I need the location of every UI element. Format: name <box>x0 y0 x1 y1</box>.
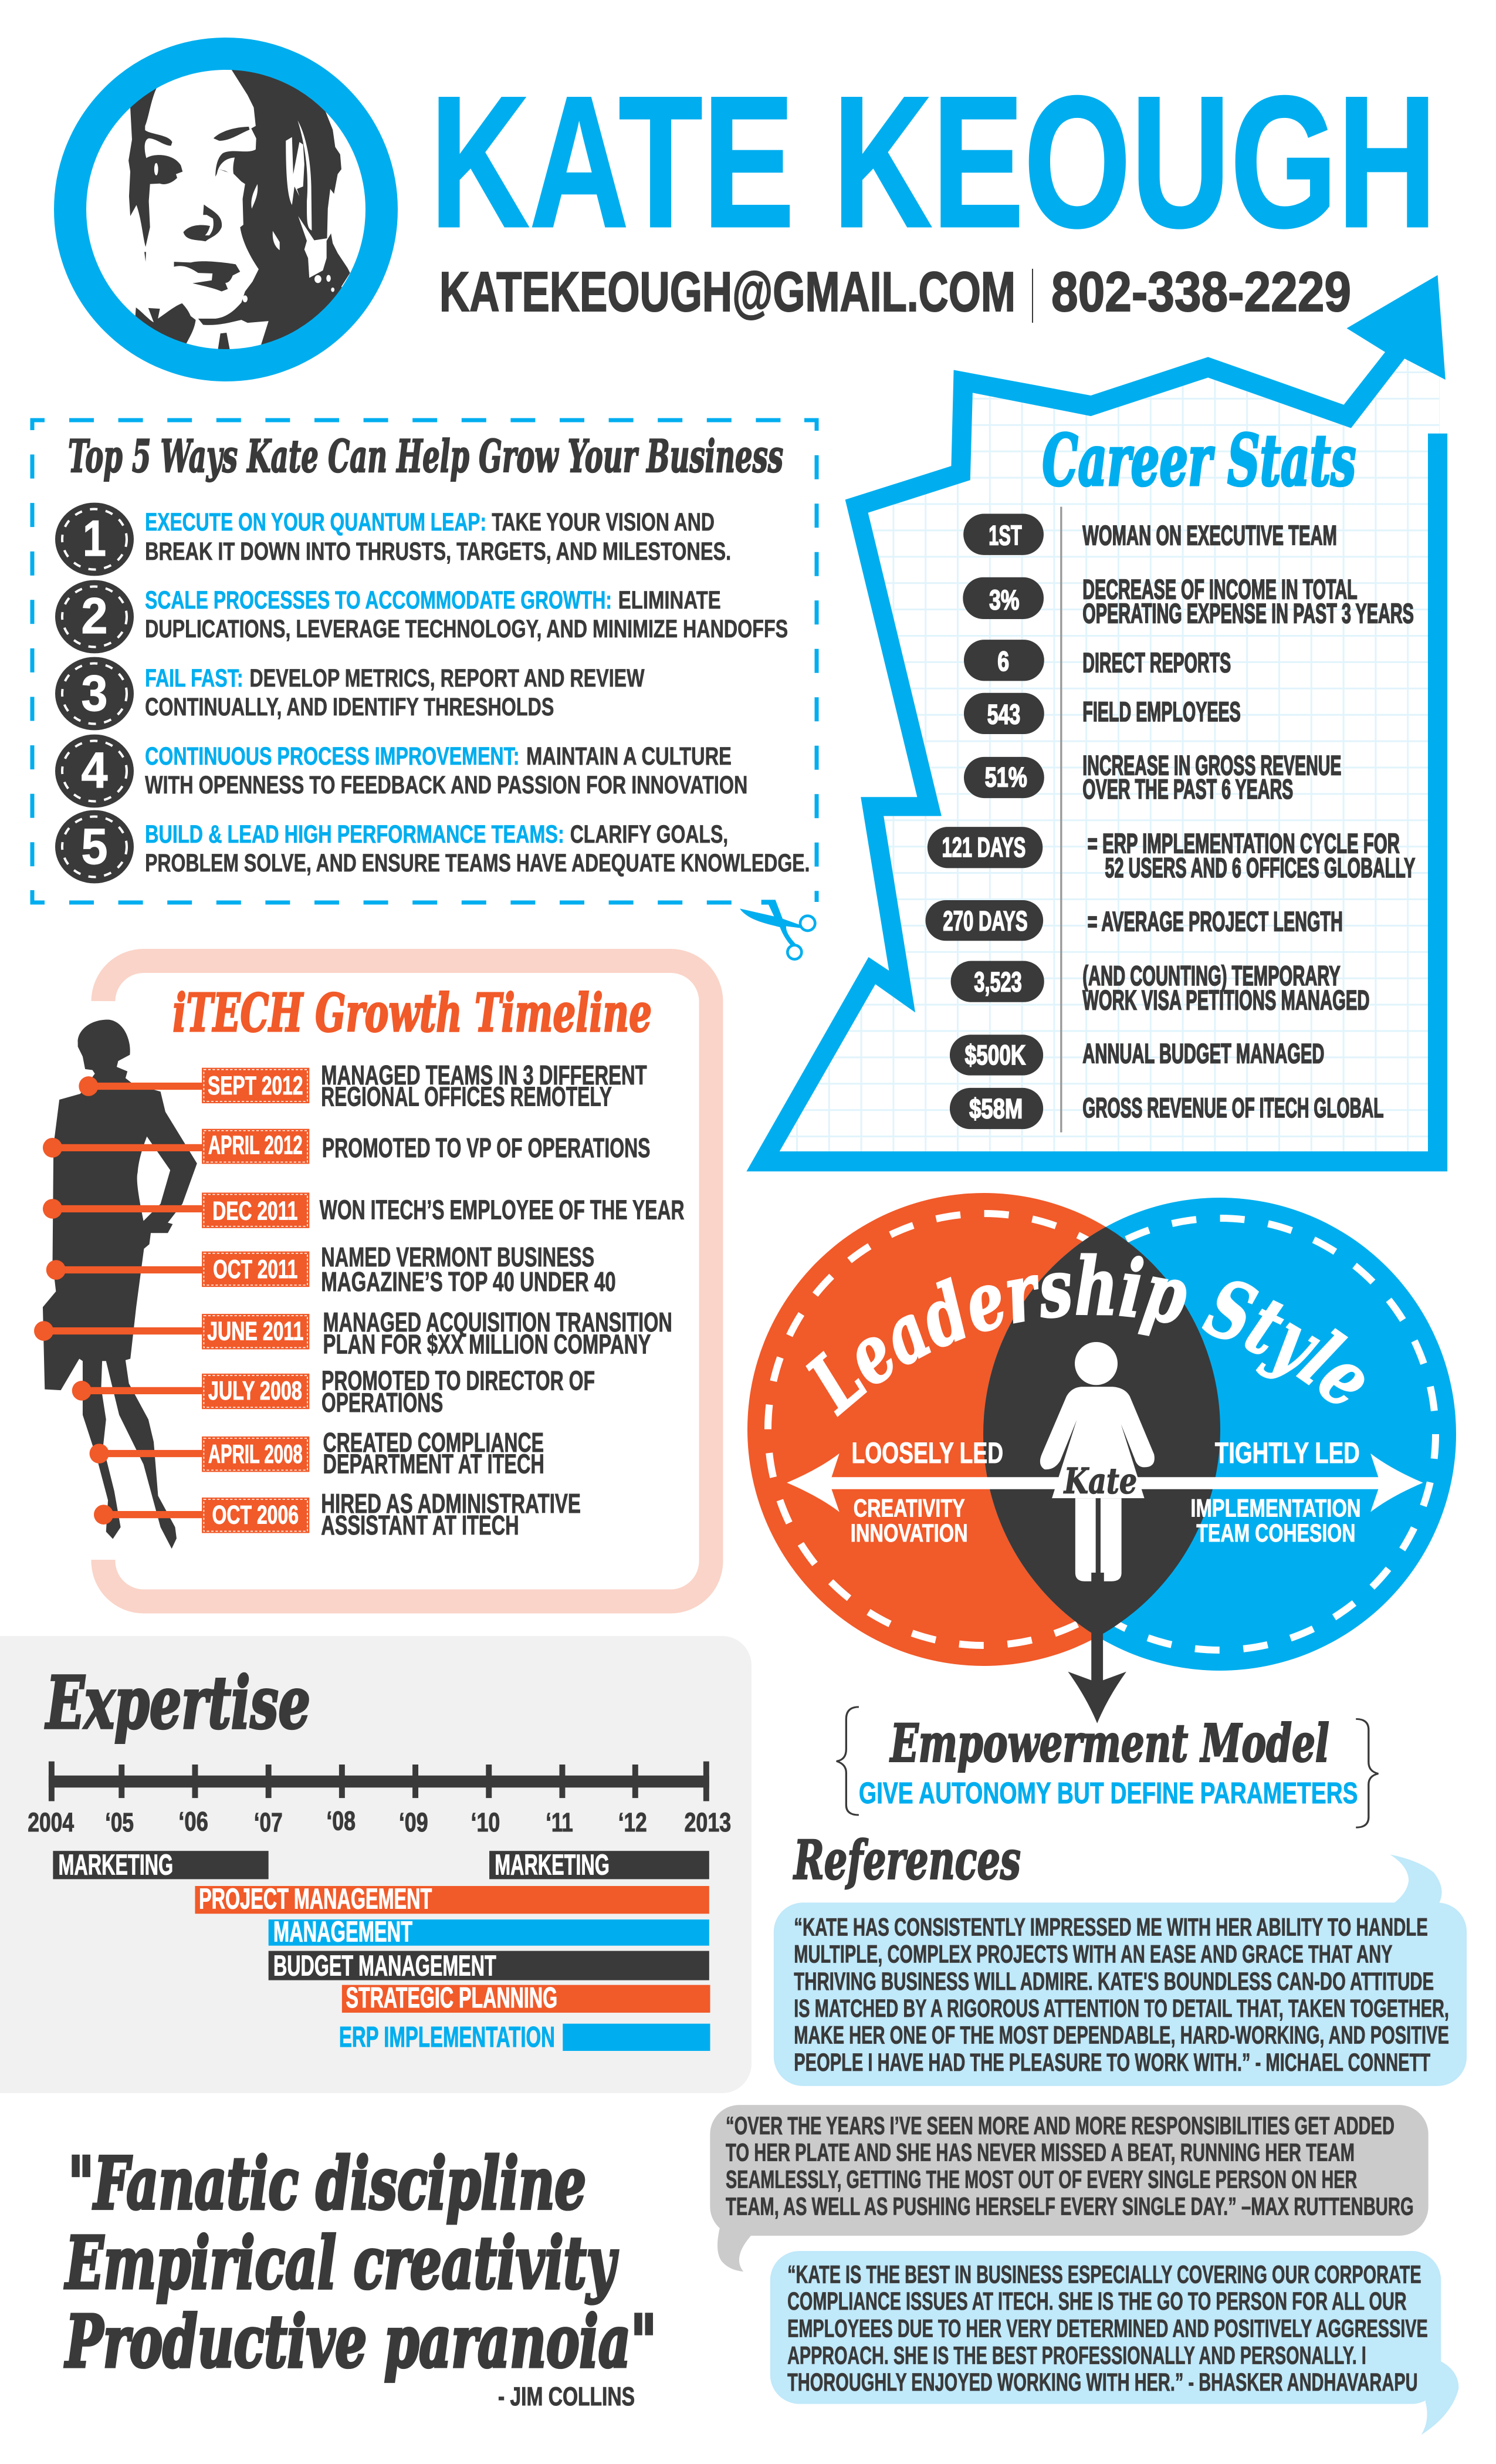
stats table: $58M <box>969 1094 1023 1124</box>
year labels: 2004 <box>28 1808 74 1838</box>
panel: growth timeline: MAGAZINE’S TOP 40 UNDER 40 <box>321 1267 616 1297</box>
portrait ring <box>70 54 381 365</box>
panel: growth timeline: MANAGED ACQUISITION TRANSITION <box>323 1307 672 1337</box>
timeline entries: DEC 2011 <box>212 1196 297 1225</box>
venn labels: IMPLEMENTATION <box>1190 1494 1361 1522</box>
panel: growth timeline: HIRED AS ADMINISTRATIVE <box>321 1489 581 1519</box>
quote <box>65 2141 656 2411</box>
number badge 1 <box>55 503 134 576</box>
heading: References <box>793 1829 1021 1892</box>
stats table <box>925 419 1415 1133</box>
down arrow <box>1068 1631 1126 1723</box>
list text: SCALE PROCESSES TO ACCOMMODATE GROWTH: <box>145 586 612 614</box>
speech bubble 1 <box>774 1854 1467 2086</box>
year labels: ‘12 <box>618 1808 647 1838</box>
number badge 2 <box>55 580 134 653</box>
stats table: 121 DAYS <box>942 832 1025 863</box>
year labels: ‘09 <box>399 1808 428 1838</box>
list text: CONTINUALLY, AND IDENTIFY THRESHOLDS <box>145 692 554 721</box>
expertise bars: MARKETING <box>58 1849 173 1881</box>
list text: CLARIFY GOALS, <box>570 820 728 848</box>
arrow frame <box>746 275 1447 1171</box>
panel: references <box>710 1829 1467 2435</box>
list text: BUILD & LEAD HIGH PERFORMANCE TEAMS: <box>145 820 564 848</box>
panel: growth timeline: PLAN FOR $XX MILLION COMPANY <box>323 1329 651 1360</box>
icon: scissors <box>740 900 815 959</box>
phone: 802-338-2229 <box>1051 261 1351 323</box>
timeline entries: SEPT 2012 <box>208 1071 303 1100</box>
quote: "Fanatic discipline <box>68 2141 586 2226</box>
empowerment model <box>837 1707 1378 1827</box>
venn labels: LOOSELY LED <box>851 1437 1003 1469</box>
silhouette <box>43 1020 197 1549</box>
heading: Expertise <box>45 1661 310 1745</box>
number badge 5: 5 <box>81 819 108 875</box>
list text: TAKE YOUR VISION AND <box>492 508 715 536</box>
stats table: 6 <box>997 646 1009 677</box>
expertise bars: STRATEGIC PLANNING <box>346 1982 557 2014</box>
year labels: ‘11 <box>546 1808 573 1838</box>
number badge 3 <box>55 657 134 730</box>
email: KATEKEOUGH@GMAIL.COM <box>439 261 1016 323</box>
panel: growth timeline: MANAGED TEAMS IN 3 DIFFERENT <box>321 1060 647 1091</box>
speech bubble 2 <box>710 2105 1429 2272</box>
year labels: ‘07 <box>254 1808 283 1838</box>
venn labels: TIGHTLY LED <box>1215 1437 1360 1469</box>
number badge 4 <box>55 735 134 807</box>
stats table: 3,523 <box>974 966 1022 998</box>
expertise bars: BUDGET MANAGEMENT <box>273 1950 496 1982</box>
list text: EXECUTE ON YOUR QUANTUM LEAP: <box>145 508 486 536</box>
stats table: WORK VISA PETITIONS MANAGED <box>1082 985 1369 1016</box>
year labels: ‘05 <box>105 1808 134 1838</box>
date boxes <box>202 1068 309 1533</box>
list text: MAINTAIN A CULTURE <box>526 742 732 770</box>
panel: career stats <box>746 275 1449 1179</box>
heading: Career Stats <box>1042 419 1356 502</box>
timeline entries: OCT 2006 <box>212 1500 299 1529</box>
number badge 5 <box>55 810 134 883</box>
stats table: 270 DAYS <box>943 906 1028 937</box>
list text: PROBLEM SOLVE, AND ENSURE TEAMS HAVE ADEQUATE KNOWLEDGE. <box>145 849 810 877</box>
list text: BREAK IT DOWN INTO THRUSTS, TARGETS, AND MILESTONES. <box>145 537 731 565</box>
panel: growth timeline <box>34 961 711 1601</box>
year labels: 2013 <box>685 1808 731 1838</box>
label: Kate: Kate <box>1063 1461 1137 1502</box>
year labels <box>28 1806 731 1838</box>
list text: DEVELOP METRICS, REPORT AND REVIEW <box>249 664 645 692</box>
panel: growth timeline: PROMOTED TO DIRECTOR OF <box>321 1365 595 1396</box>
expertise bars <box>53 1849 710 2053</box>
panel: growth timeline: CREATED COMPLIANCE <box>323 1428 544 1458</box>
stats table: FIELD EMPLOYEES <box>1082 697 1241 727</box>
number badge 4: 4 <box>81 742 108 799</box>
timeline entries: APRIL 2012 <box>208 1130 303 1160</box>
quote: Productive paranoia" <box>65 2299 656 2384</box>
expertise bars: PROJECT MANAGEMENT <box>199 1883 432 1915</box>
stats table: WOMAN ON EXECUTIVE TEAM <box>1082 520 1337 551</box>
panel: expertise <box>0 1636 752 2411</box>
heading: Top 5 Ways Kate Can Help Grow Your Business <box>68 430 783 482</box>
curved heading: Leadership Style <box>805 1253 1365 1417</box>
panel: top 5 ways <box>32 420 817 959</box>
quote: Empirical creativity <box>65 2220 618 2305</box>
timeline entries: JULY 2008 <box>208 1376 302 1405</box>
list text: CONTINUOUS PROCESS IMPROVEMENT: <box>145 742 519 770</box>
quote: - JIM COLLINS <box>498 2382 635 2411</box>
stats table: 51% <box>985 762 1027 793</box>
stats table: ANNUAL BUDGET MANAGED <box>1082 1038 1324 1069</box>
stats table: 1ST <box>989 520 1022 551</box>
panel: growth timeline: ASSISTANT AT ITECH <box>321 1510 519 1540</box>
timeline connectors <box>34 1076 205 1525</box>
expertise bars: MANAGEMENT <box>273 1916 412 1948</box>
year axis <box>49 1762 709 1801</box>
panel: growth timeline: REGIONAL OFFICES REMOTELY <box>321 1081 612 1112</box>
number badge 3: 3 <box>81 665 108 722</box>
list text: DUPLICATIONS, LEVERAGE TECHNOLOGY, AND MINIMIZE HANDOFFS <box>145 614 788 643</box>
expertise bars: ERP IMPLEMENTATION <box>339 2021 555 2053</box>
panel: growth timeline: NAMED VERMONT BUSINESS <box>321 1242 594 1272</box>
stats table: 3% <box>989 584 1020 616</box>
list text: ELIMINATE <box>618 586 721 614</box>
number badge 2: 2 <box>81 588 108 644</box>
panel: growth timeline: DEPARTMENT AT ITECH <box>323 1449 544 1479</box>
venn labels: CREATIVITY <box>854 1494 965 1522</box>
timeline entries: JUNE 2011 <box>207 1316 303 1346</box>
stats table: $500K <box>965 1040 1025 1071</box>
stats table: INCREASE IN GROSS REVENUE <box>1082 750 1341 781</box>
panel: growth timeline: PROMOTED TO VP OF OPERATIONS <box>322 1133 651 1163</box>
stats table: DIRECT REPORTS <box>1082 647 1231 678</box>
portrait <box>128 70 350 349</box>
expertise bars: MARKETING <box>495 1849 610 1881</box>
list text: WITH OPENNESS TO FEEDBACK AND PASSION FOR INNOVATION <box>145 770 747 799</box>
panel: growth timeline: WON ITECH’S EMPLOYEE OF THE YEAR <box>320 1195 685 1225</box>
timeline entries: OCT 2011 <box>213 1255 297 1283</box>
icon: woman figure <box>1040 1342 1155 1581</box>
stats table: (AND COUNTING) TEMPORARY <box>1082 961 1341 992</box>
venn labels: INNOVATION <box>851 1519 968 1547</box>
panel: leadership style venn <box>747 1193 1456 1828</box>
number badge 1: 1 <box>83 511 106 567</box>
timeline entries: APRIL 2008 <box>208 1439 303 1469</box>
stats table: OVER THE PAST 6 YEARS <box>1082 774 1293 805</box>
double arrow <box>787 1454 1423 1512</box>
speech bubble 3 <box>770 2251 1458 2435</box>
venn labels <box>851 1437 1361 1547</box>
panel: header <box>70 54 1437 369</box>
stats table: DECREASE OF INCOME IN TOTAL <box>1082 574 1358 605</box>
heading: iTECH Growth Timeline <box>172 982 652 1043</box>
year labels: ‘10 <box>471 1808 500 1838</box>
stats table: = AVERAGE PROJECT LENGTH <box>1088 907 1343 937</box>
timeline entries <box>207 1071 303 1529</box>
stats table: 543 <box>987 699 1020 730</box>
year labels: ‘06 <box>178 1807 208 1837</box>
venn labels: TEAM COHESION <box>1196 1519 1355 1547</box>
panel: growth timeline: OPERATIONS <box>321 1388 443 1418</box>
year labels: ‘08 <box>326 1806 356 1836</box>
list text: FAIL FAST: <box>145 664 243 692</box>
list text <box>145 508 810 877</box>
